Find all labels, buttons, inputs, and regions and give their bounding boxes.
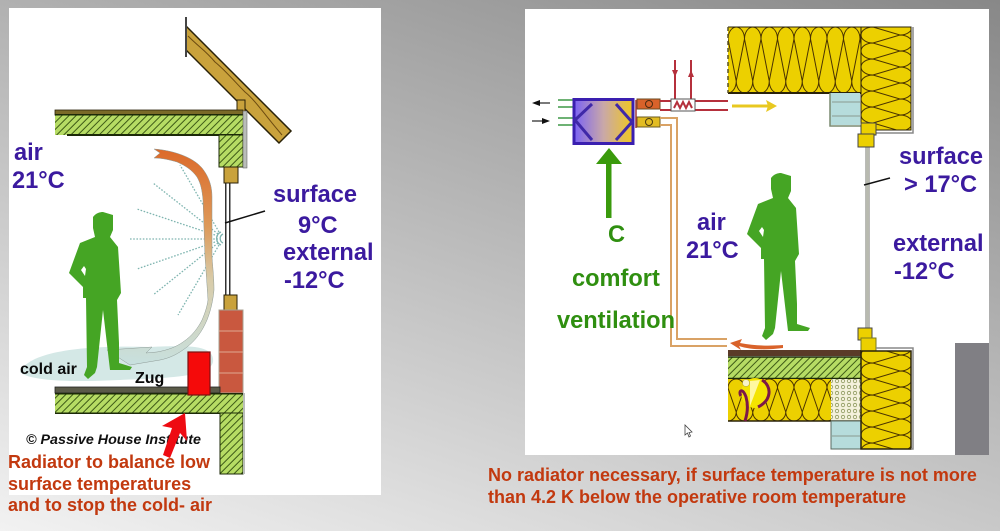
- roof section: [185, 17, 291, 143]
- floor slab: [55, 387, 245, 474]
- green supply arrow: [596, 148, 622, 218]
- outside air arrows: [532, 100, 574, 125]
- label: Zug: Zug: [135, 370, 164, 387]
- yellow supply air arrow: [732, 100, 777, 112]
- radiator: [188, 352, 210, 395]
- top insulation: [728, 27, 913, 133]
- panel: comfort ventilation: [488, 9, 989, 507]
- grey block: [955, 343, 989, 455]
- window: [224, 167, 238, 310]
- red arrow to radiator: [162, 413, 187, 458]
- caption left: and to stop the cold- air: [8, 495, 212, 515]
- caption right: No radiator necessary, if surface temperature is not more: [488, 465, 977, 485]
- heat recovery unit: [574, 100, 633, 144]
- label: external temperature: external: [283, 240, 374, 266]
- person silhouette left: [69, 212, 132, 379]
- cold air pool: [20, 346, 213, 381]
- ceiling slab: [55, 110, 247, 168]
- fans: [636, 99, 660, 128]
- caption left: Radiator to balance low: [8, 452, 211, 472]
- label: external temperature: -12°C: [284, 268, 345, 294]
- label: air temperature: 21°C: [12, 168, 65, 194]
- caption right: than 4.2 K below the operative room temperature: [488, 487, 906, 507]
- label: air temperature right: 21°C: [686, 238, 739, 264]
- heat source symbol: [740, 378, 769, 421]
- panel background left: [9, 8, 381, 495]
- panel background right: [525, 9, 989, 455]
- surface leader line right: [864, 178, 890, 185]
- supply pipes and heater: [660, 60, 728, 111]
- label: comfort ventilation: ventilation: [557, 308, 675, 334]
- copyright: © Passive House Institute: [26, 432, 202, 447]
- label: comfort ventilation: C: [608, 222, 625, 248]
- surface leader line: [225, 211, 265, 223]
- label: cold air: cold air: [20, 361, 77, 378]
- mouse cursor: [685, 425, 692, 437]
- label: comfort ventilation: comfort: [572, 266, 660, 292]
- cold draught arrow: [107, 149, 214, 365]
- label: surface temperature: surface: [273, 182, 357, 208]
- floor construction: [728, 348, 913, 449]
- label: external temperature right: external: [893, 231, 984, 257]
- label: surface temperature right: > 17°C: [904, 172, 977, 198]
- radiation rays: [130, 165, 223, 315]
- window right: [858, 123, 876, 351]
- label: surface temperature right: surface: [899, 144, 983, 170]
- label: surface temperature: 9°C: [298, 213, 338, 239]
- label: external temperature right: -12°C: [894, 259, 955, 285]
- lintel block: [830, 93, 861, 126]
- extract duct: [660, 118, 727, 346]
- small extract arrow: [730, 339, 783, 350]
- brick wall: [219, 310, 243, 393]
- person silhouette right: [747, 173, 810, 340]
- panel: radiator needed: [8, 8, 381, 515]
- label: air temperature right: air: [697, 210, 726, 236]
- label: air temperature: air: [14, 140, 43, 166]
- caption left: surface temperatures: [8, 474, 191, 494]
